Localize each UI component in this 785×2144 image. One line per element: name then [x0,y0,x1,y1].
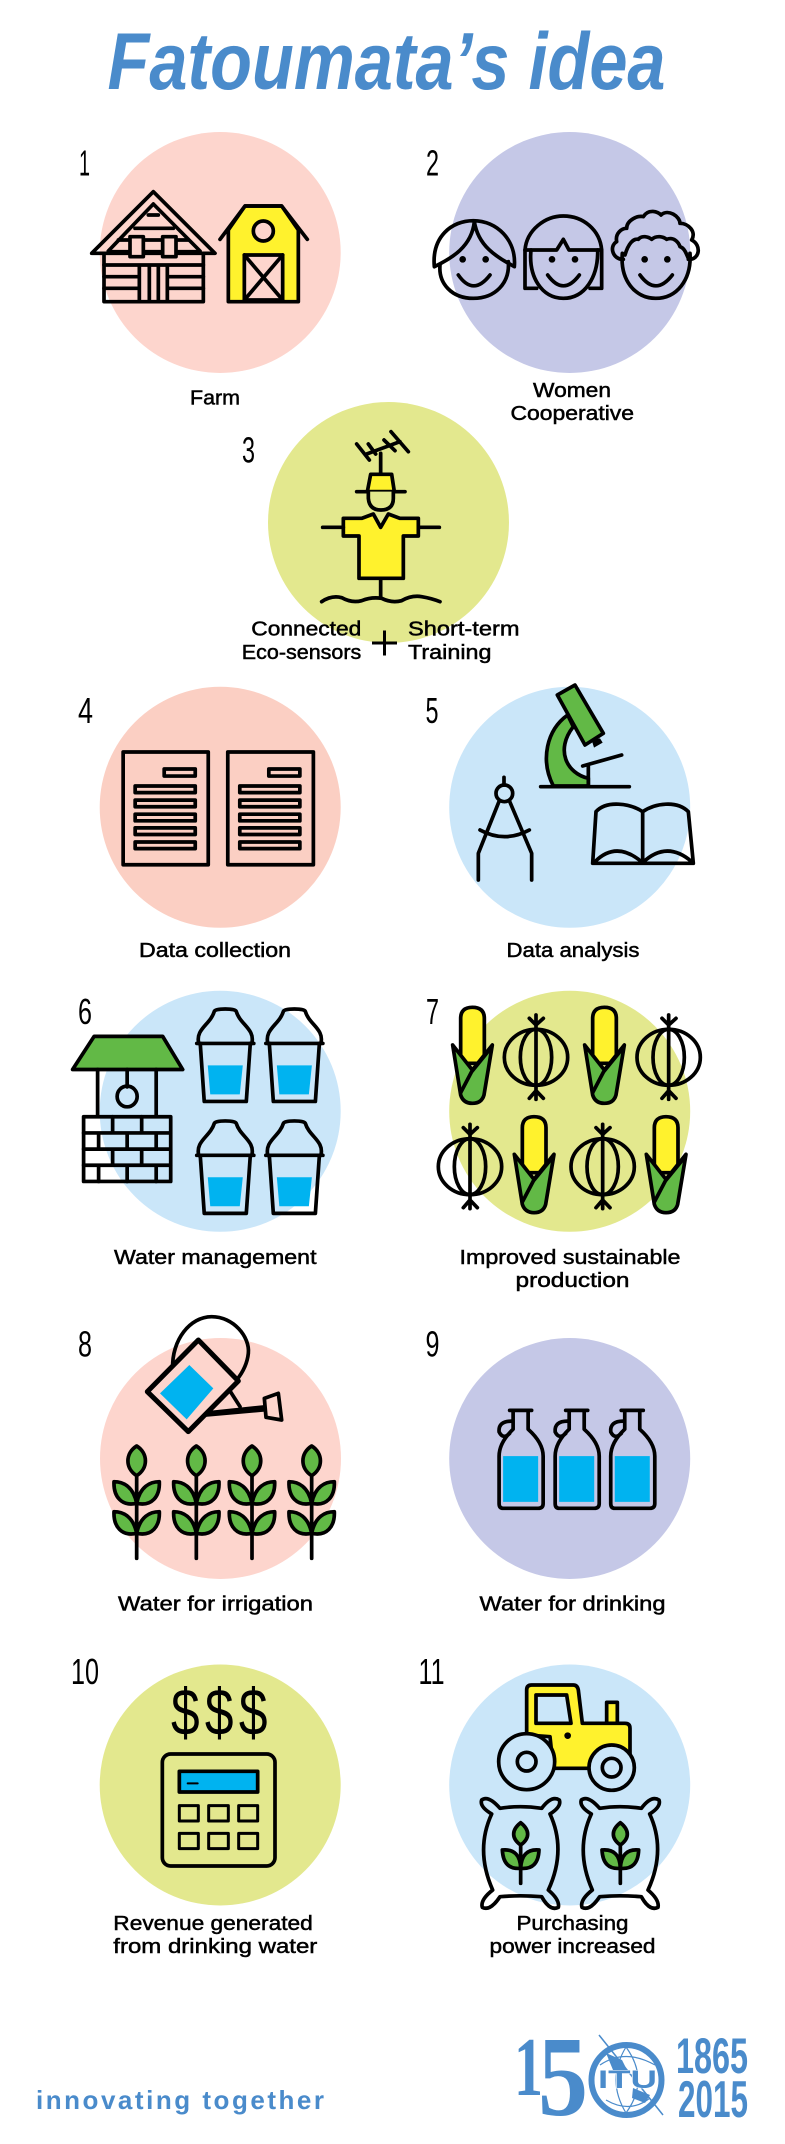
icon: three bottles [499,1410,655,1508]
icon: watering can and plants [114,1317,334,1558]
label: Revenue generated from drinking water: Revenue generated [113,1912,313,1935]
label: Improved sustainable production: Improved sustainable [460,1246,680,1269]
label: Data collection: Data collection [139,939,291,962]
icon: scarecrow with antenna [322,432,440,602]
label: Purchasing power increased: Purchasing [516,1912,628,1935]
title: Fatoumata’s idea [108,17,666,107]
label: Water for drinking: Water for drinking [480,1592,666,1616]
label: Water management: Water management [114,1246,317,1269]
panel: farm [79,132,341,410]
step number 10: 10 [71,1651,99,1692]
label: Farm: Farm [190,386,240,410]
icon: ITU globe [592,2035,663,2115]
icon: tractor and seed sacks [481,1685,659,1908]
panel: revenue generated [71,1651,341,1958]
panel: connected eco-sensors and training: Training [408,641,492,664]
step number 4: 4 [78,690,93,731]
panel: women cooperative: Cooperative [510,402,634,425]
label: Data analysis: Data analysis [506,939,640,962]
panel: data analysis [426,685,693,962]
step number 9: 9 [426,1324,440,1364]
icon: corn and onions [438,1007,700,1213]
icon: microscope, compass and book [478,685,693,880]
icon: well and four buckets [73,1009,323,1213]
step number 3: 3 [242,430,255,470]
step number 7: 7 [426,991,439,1032]
panel: purchasing power increased: power increased [490,1935,656,1958]
panel: water for irrigation [78,1317,341,1616]
panel: connected eco-sensors and training [242,402,520,664]
icon: two documents [123,752,313,865]
icon: three women [434,211,698,298]
logo: ITU 150 years [514,2013,748,2140]
plus sign [372,630,397,656]
panel: women cooperative [426,132,698,425]
step number 5: 5 [426,690,438,731]
tagline: innovating together [36,2085,324,2115]
panel: improved sustainable production [426,991,700,1292]
icon: dollar signs: $$$ [171,1675,267,1749]
step number 11: 11 [418,1651,444,1692]
years 1865 2015: 1865 [676,2028,748,2084]
icon: ITU globe: ITU [598,2066,657,2094]
number 15: 5 [538,2013,588,2140]
panel: purchasing power increased [418,1651,690,1958]
panel: water management [73,991,341,1269]
step number 1: 1 [79,142,90,184]
icon: calculator [162,1754,275,1866]
step number 2: 2 [426,142,439,184]
panel: connected eco-sensors and training: Eco-sensors [242,641,361,664]
number 15 [514,2013,588,2140]
label: Short-term Training: Short-term [408,618,520,640]
panel: revenue generated: from drinking water [113,1935,318,1958]
step number 8: 8 [78,1324,92,1364]
label: Women Cooperative: Women [533,379,611,402]
label: Water for irrigation: Water for irrigation [118,1592,313,1616]
panel: improved sustainable production: production [516,1269,630,1292]
step number 6: 6 [78,991,92,1032]
number 15: 1 [514,2021,543,2114]
icon: cabin and barn [92,192,307,302]
panel: data collection [78,687,341,962]
panel: water for drinking [426,1324,690,1616]
label: Connected Eco-sensors: Connected [251,618,361,640]
